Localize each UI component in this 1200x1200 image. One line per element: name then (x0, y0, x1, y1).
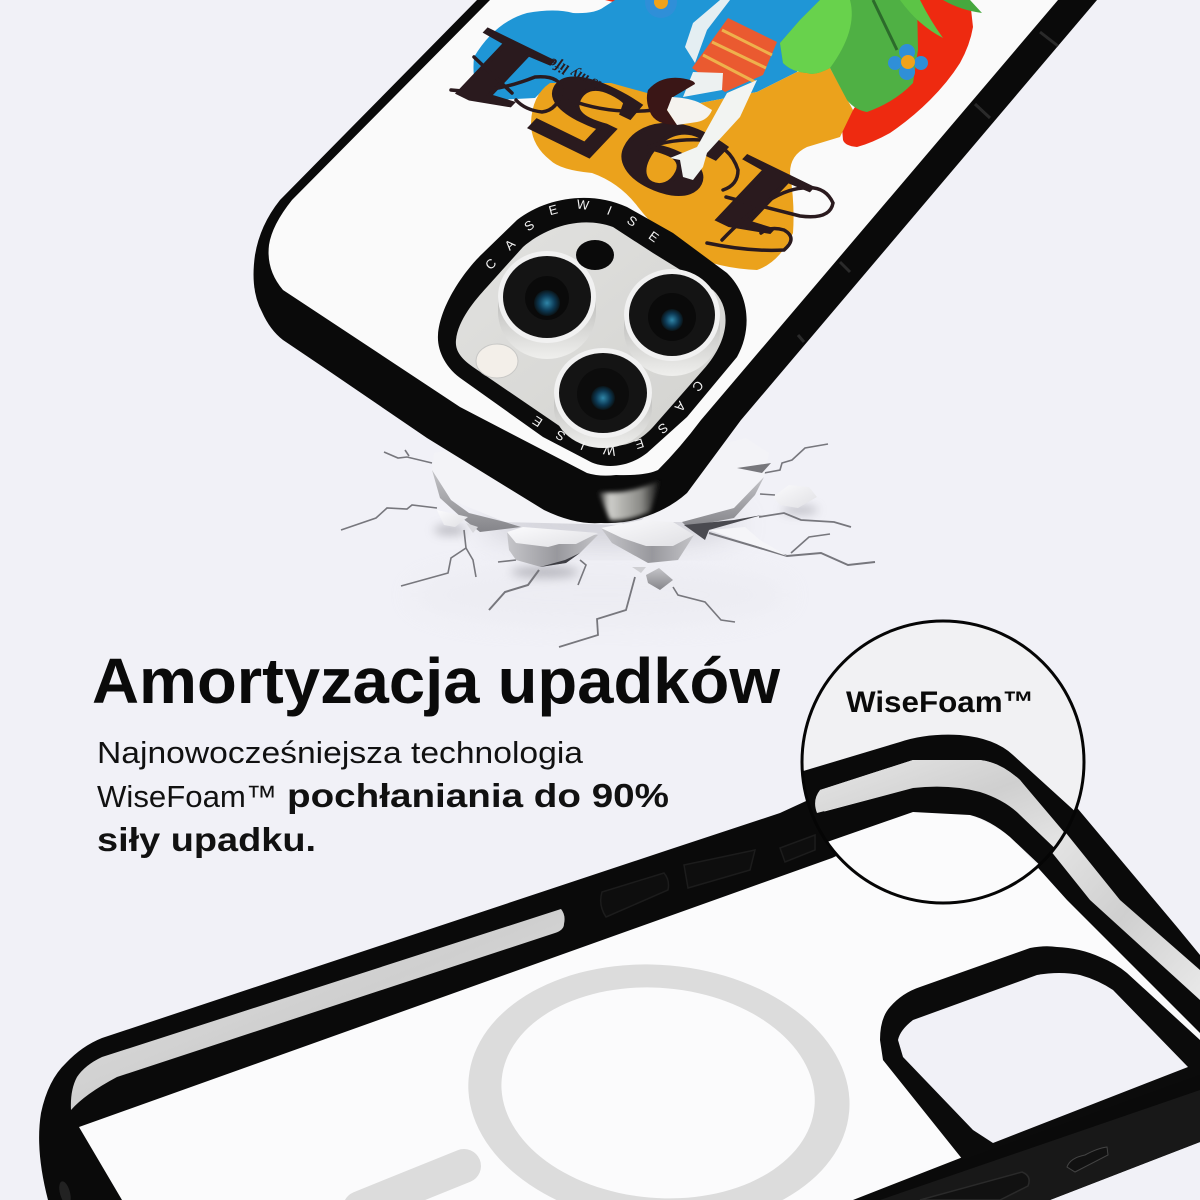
circle outline (802, 621, 1084, 903)
broken rock centre (601, 528, 694, 563)
ground cracks (341, 444, 875, 647)
CASEWISE ring text top: CASEWISE (486, 199, 660, 268)
case black frame (39, 733, 1200, 1200)
bumper corner reflection (598, 480, 660, 520)
small script line: is my life (546, 54, 604, 93)
rock contact shadows (434, 506, 818, 578)
flash (476, 344, 518, 378)
camera cutout opening (898, 973, 1188, 1143)
magnified contents (804, 734, 1076, 866)
magnified foam strip (815, 760, 1064, 847)
magnified outer band (804, 734, 1074, 832)
woman: chest and neck (683, 72, 723, 97)
script swashes (451, 57, 833, 250)
side buttons on bumper (798, 32, 1058, 342)
description text: pochłaniania do 90% (287, 777, 669, 814)
right raised slab (640, 438, 769, 522)
description text: siły upadku. (97, 821, 316, 858)
case black bumper (254, 0, 1097, 523)
script lettering: 1951 (428, 0, 827, 274)
CASEWISE ring text bottom: CASEWISE (532, 382, 702, 456)
blue flower (888, 44, 928, 80)
foam strip left (71, 909, 565, 1110)
case artwork (428, 0, 982, 274)
woman: lower arm and hand (670, 80, 757, 180)
woman: face (667, 97, 712, 125)
circle label: WiseFoam™ (846, 686, 1034, 719)
white back panel (269, 0, 1058, 476)
broken rock left (507, 532, 598, 567)
side buttons (601, 835, 815, 917)
clear case interior (79, 814, 1200, 1200)
corner speaker hole (57, 1180, 73, 1200)
small rock fragments (437, 510, 468, 527)
lidar hole (576, 240, 614, 270)
heading: Amortyzacja upadków (92, 645, 780, 717)
woman: raised arm (685, 0, 730, 63)
foam strip right (1050, 828, 1200, 1000)
lens: right (624, 269, 720, 376)
magnified white interior (828, 812, 1036, 902)
description text (97, 735, 669, 858)
description text: Najnowocześniejsza technologia (97, 735, 584, 770)
bottom edge button (920, 1172, 1029, 1200)
blue shape (473, 0, 830, 105)
magnetic ring (457, 949, 861, 1200)
woman: hair (647, 78, 695, 125)
orange shape (531, 68, 853, 270)
lower band sheen (880, 1090, 1200, 1200)
left raised slab (432, 440, 625, 525)
cracked ground impact illustration (341, 438, 875, 647)
top flower (645, 0, 677, 18)
lens: bottom (554, 348, 652, 448)
description text: WiseFoam™ (97, 779, 277, 814)
camera cutout frame (880, 946, 1200, 1160)
magnetic alignment bar (360, 1166, 464, 1200)
lens: left (498, 251, 596, 359)
camera bump (438, 198, 747, 466)
top phone in case, falling (254, 0, 1097, 524)
green leaves (780, 0, 918, 112)
woman: dress (692, 18, 777, 92)
silver camera plate (456, 222, 726, 446)
camera ring (438, 198, 747, 466)
lower clear case (39, 733, 1200, 1200)
bottom edge port (1067, 1147, 1108, 1172)
magnified inner band (816, 786, 1054, 864)
magnified WiseFoam detail circle (800, 620, 1086, 904)
red shape (842, 0, 973, 147)
soft shadow beneath the phone (480, 503, 740, 547)
soft shading on the ground (410, 563, 790, 627)
